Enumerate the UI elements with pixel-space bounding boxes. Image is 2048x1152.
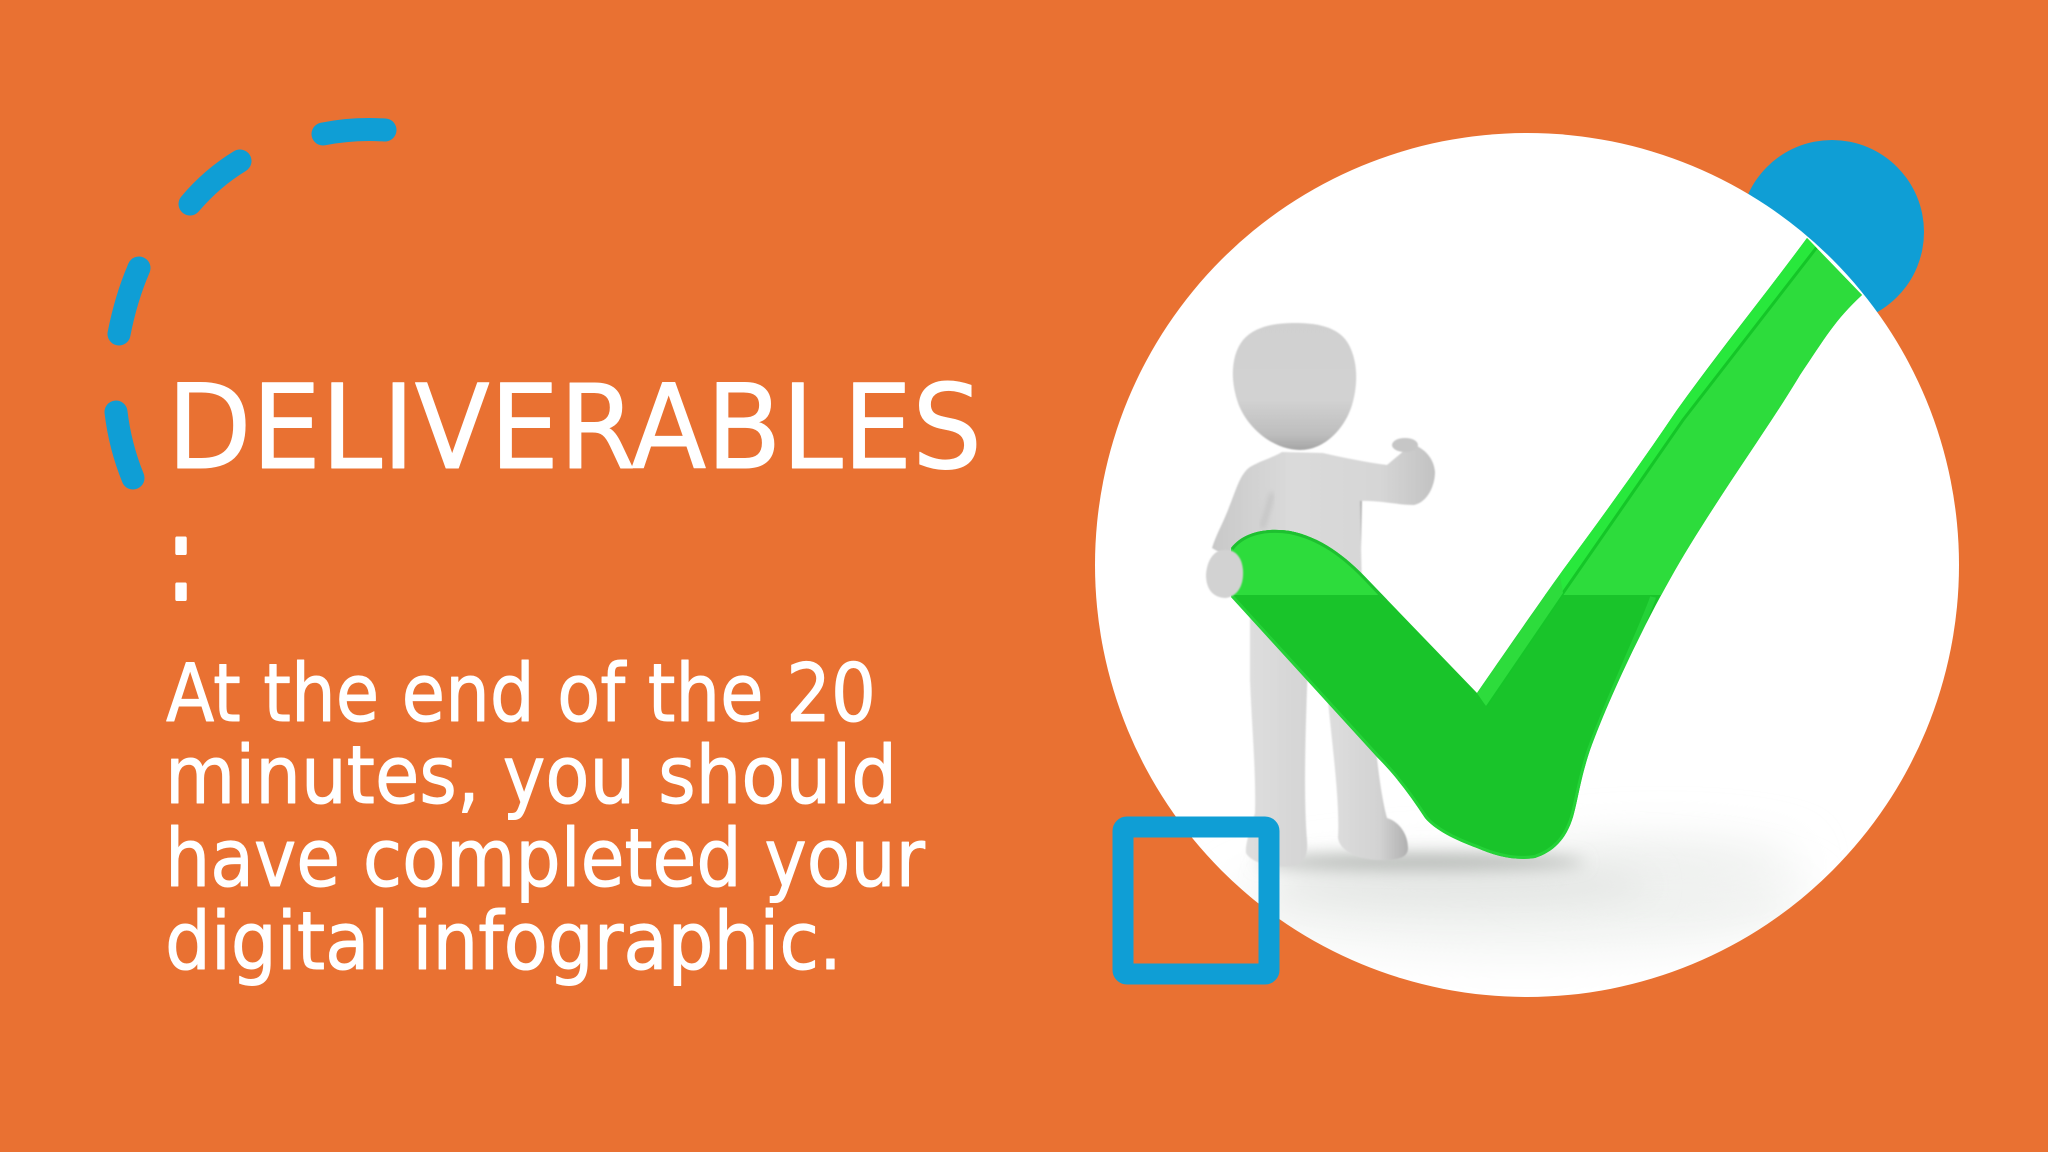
head bbox=[1233, 323, 1356, 450]
body text: digital infographic. bbox=[165, 895, 842, 988]
body text: At the end of the 20 bbox=[166, 647, 876, 740]
slide: deliverables bbox=[104, 118, 1959, 997]
dark crease bbox=[1544, 246, 1818, 620]
bright ridge bbox=[1477, 238, 1817, 706]
figure hand bbox=[1206, 550, 1243, 598]
figure bbox=[1212, 323, 1435, 866]
body text: minutes, you should bbox=[165, 729, 897, 822]
ground shadow bbox=[1230, 843, 1810, 950]
back leg bbox=[1327, 690, 1408, 860]
arm crease bbox=[1262, 493, 1272, 528]
top-left rim bbox=[1231, 530, 1387, 600]
lower edge bevel bbox=[1231, 597, 1653, 859]
front leg and torso bbox=[1246, 500, 1362, 866]
torso and raised arm bbox=[1212, 446, 1436, 574]
title: DELIVERABLES bbox=[167, 359, 982, 496]
green check mark bbox=[1231, 238, 1862, 859]
body text: have completed your bbox=[165, 812, 925, 905]
decorative dashed arc bbox=[116, 130, 385, 478]
blue square outline bbox=[1123, 827, 1269, 974]
fist thumb bbox=[1392, 438, 1418, 452]
light upper face bbox=[1231, 238, 1862, 595]
lower ridge bbox=[1477, 575, 1563, 706]
image: figure holding green check mark bbox=[1200, 200, 1900, 950]
body text bbox=[165, 647, 925, 988]
title colon: : bbox=[167, 490, 195, 627]
blue circle accent bbox=[1740, 140, 1924, 324]
white image disc bbox=[1095, 133, 1959, 997]
